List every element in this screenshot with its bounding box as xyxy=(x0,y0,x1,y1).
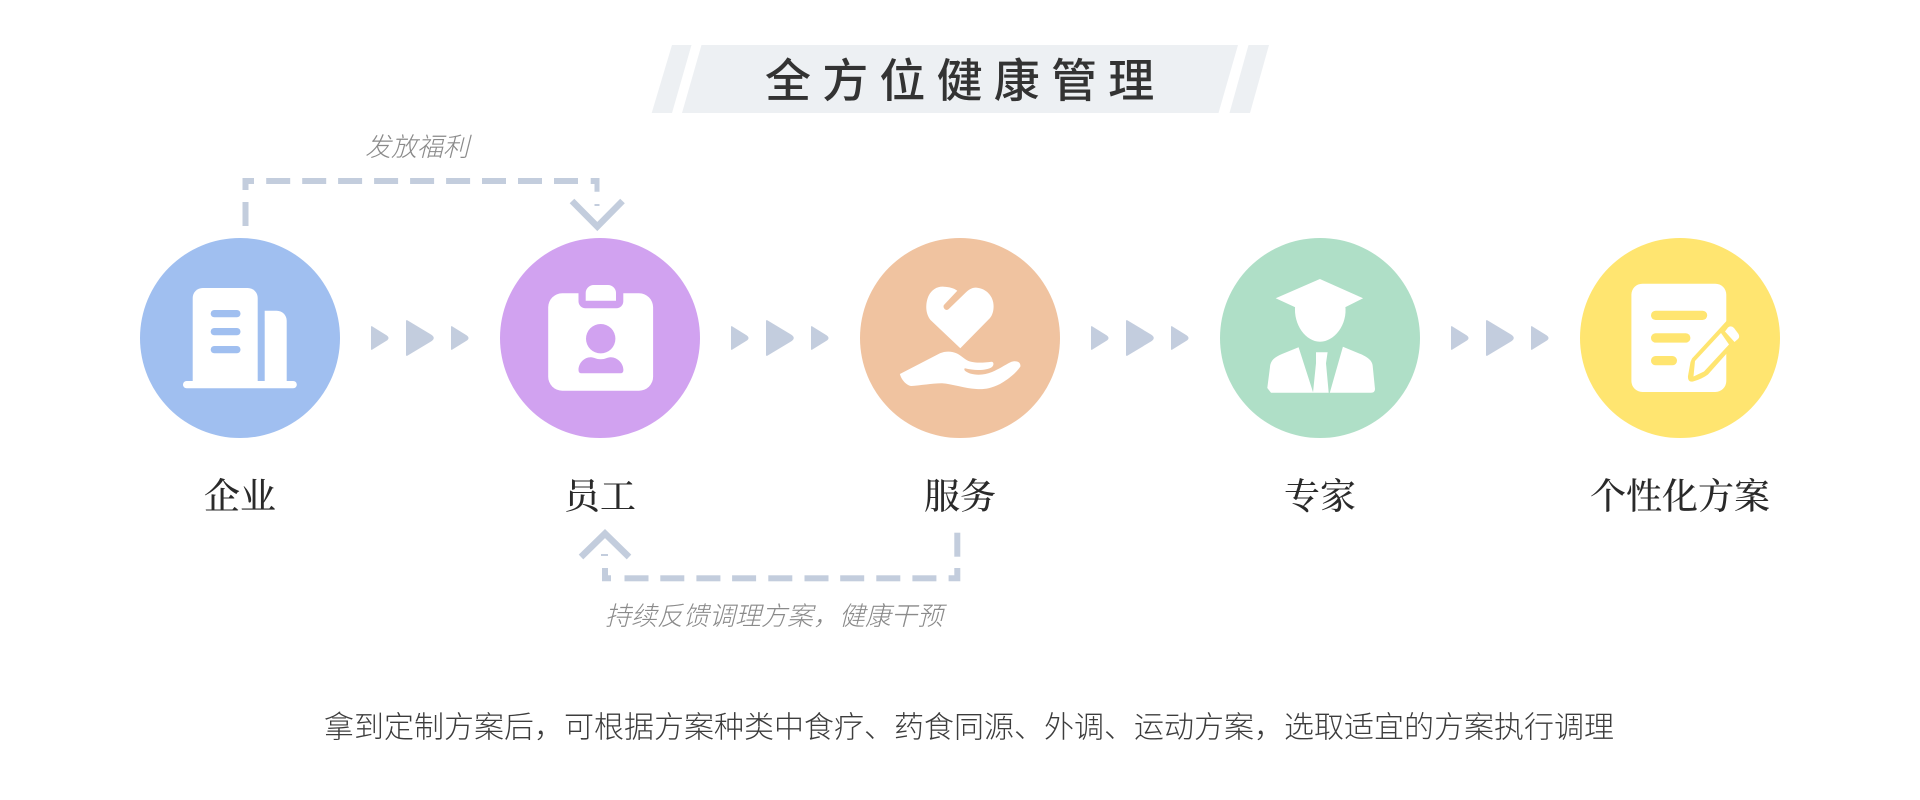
icon: heart in hand xyxy=(900,287,1020,389)
label: service: 服务 xyxy=(924,476,996,516)
step: enterprise xyxy=(140,238,340,438)
step: expert xyxy=(1220,238,1420,438)
icon: employee badge xyxy=(548,285,653,391)
icon: graduate xyxy=(1267,279,1375,393)
caption: welfare distribution: 发放福利 xyxy=(365,132,472,162)
label: employee: 员工 xyxy=(564,476,636,516)
label: expert: 专家 xyxy=(1284,476,1356,516)
step: employee xyxy=(500,238,700,438)
label: personalised plan: 个性化方案 xyxy=(1590,476,1770,516)
description text: 拿到定制方案后，可根据方案种类中食疗、药食同源、外调、运动方案，选取适宜的方案执行调理 xyxy=(324,712,1614,744)
arrows 3 xyxy=(1091,320,1188,356)
title banner: 全方位健康管理 xyxy=(765,55,1165,107)
step: personalised plan xyxy=(1580,238,1780,438)
icon: office building xyxy=(183,288,297,388)
icon: document and pencil xyxy=(1631,284,1739,392)
dashed arrow: service back to employee xyxy=(581,533,960,581)
arrows 4 xyxy=(1451,320,1548,356)
arrows 1 xyxy=(371,320,468,356)
caption: feedback: 持续反馈调理方案，健康干预 xyxy=(605,601,947,631)
title banner xyxy=(652,45,1269,113)
arrows 2 xyxy=(731,320,828,356)
step: service xyxy=(860,238,1060,438)
label: enterprise: 企业 xyxy=(204,476,276,516)
dashed arrow: enterprise to employee xyxy=(242,178,622,226)
